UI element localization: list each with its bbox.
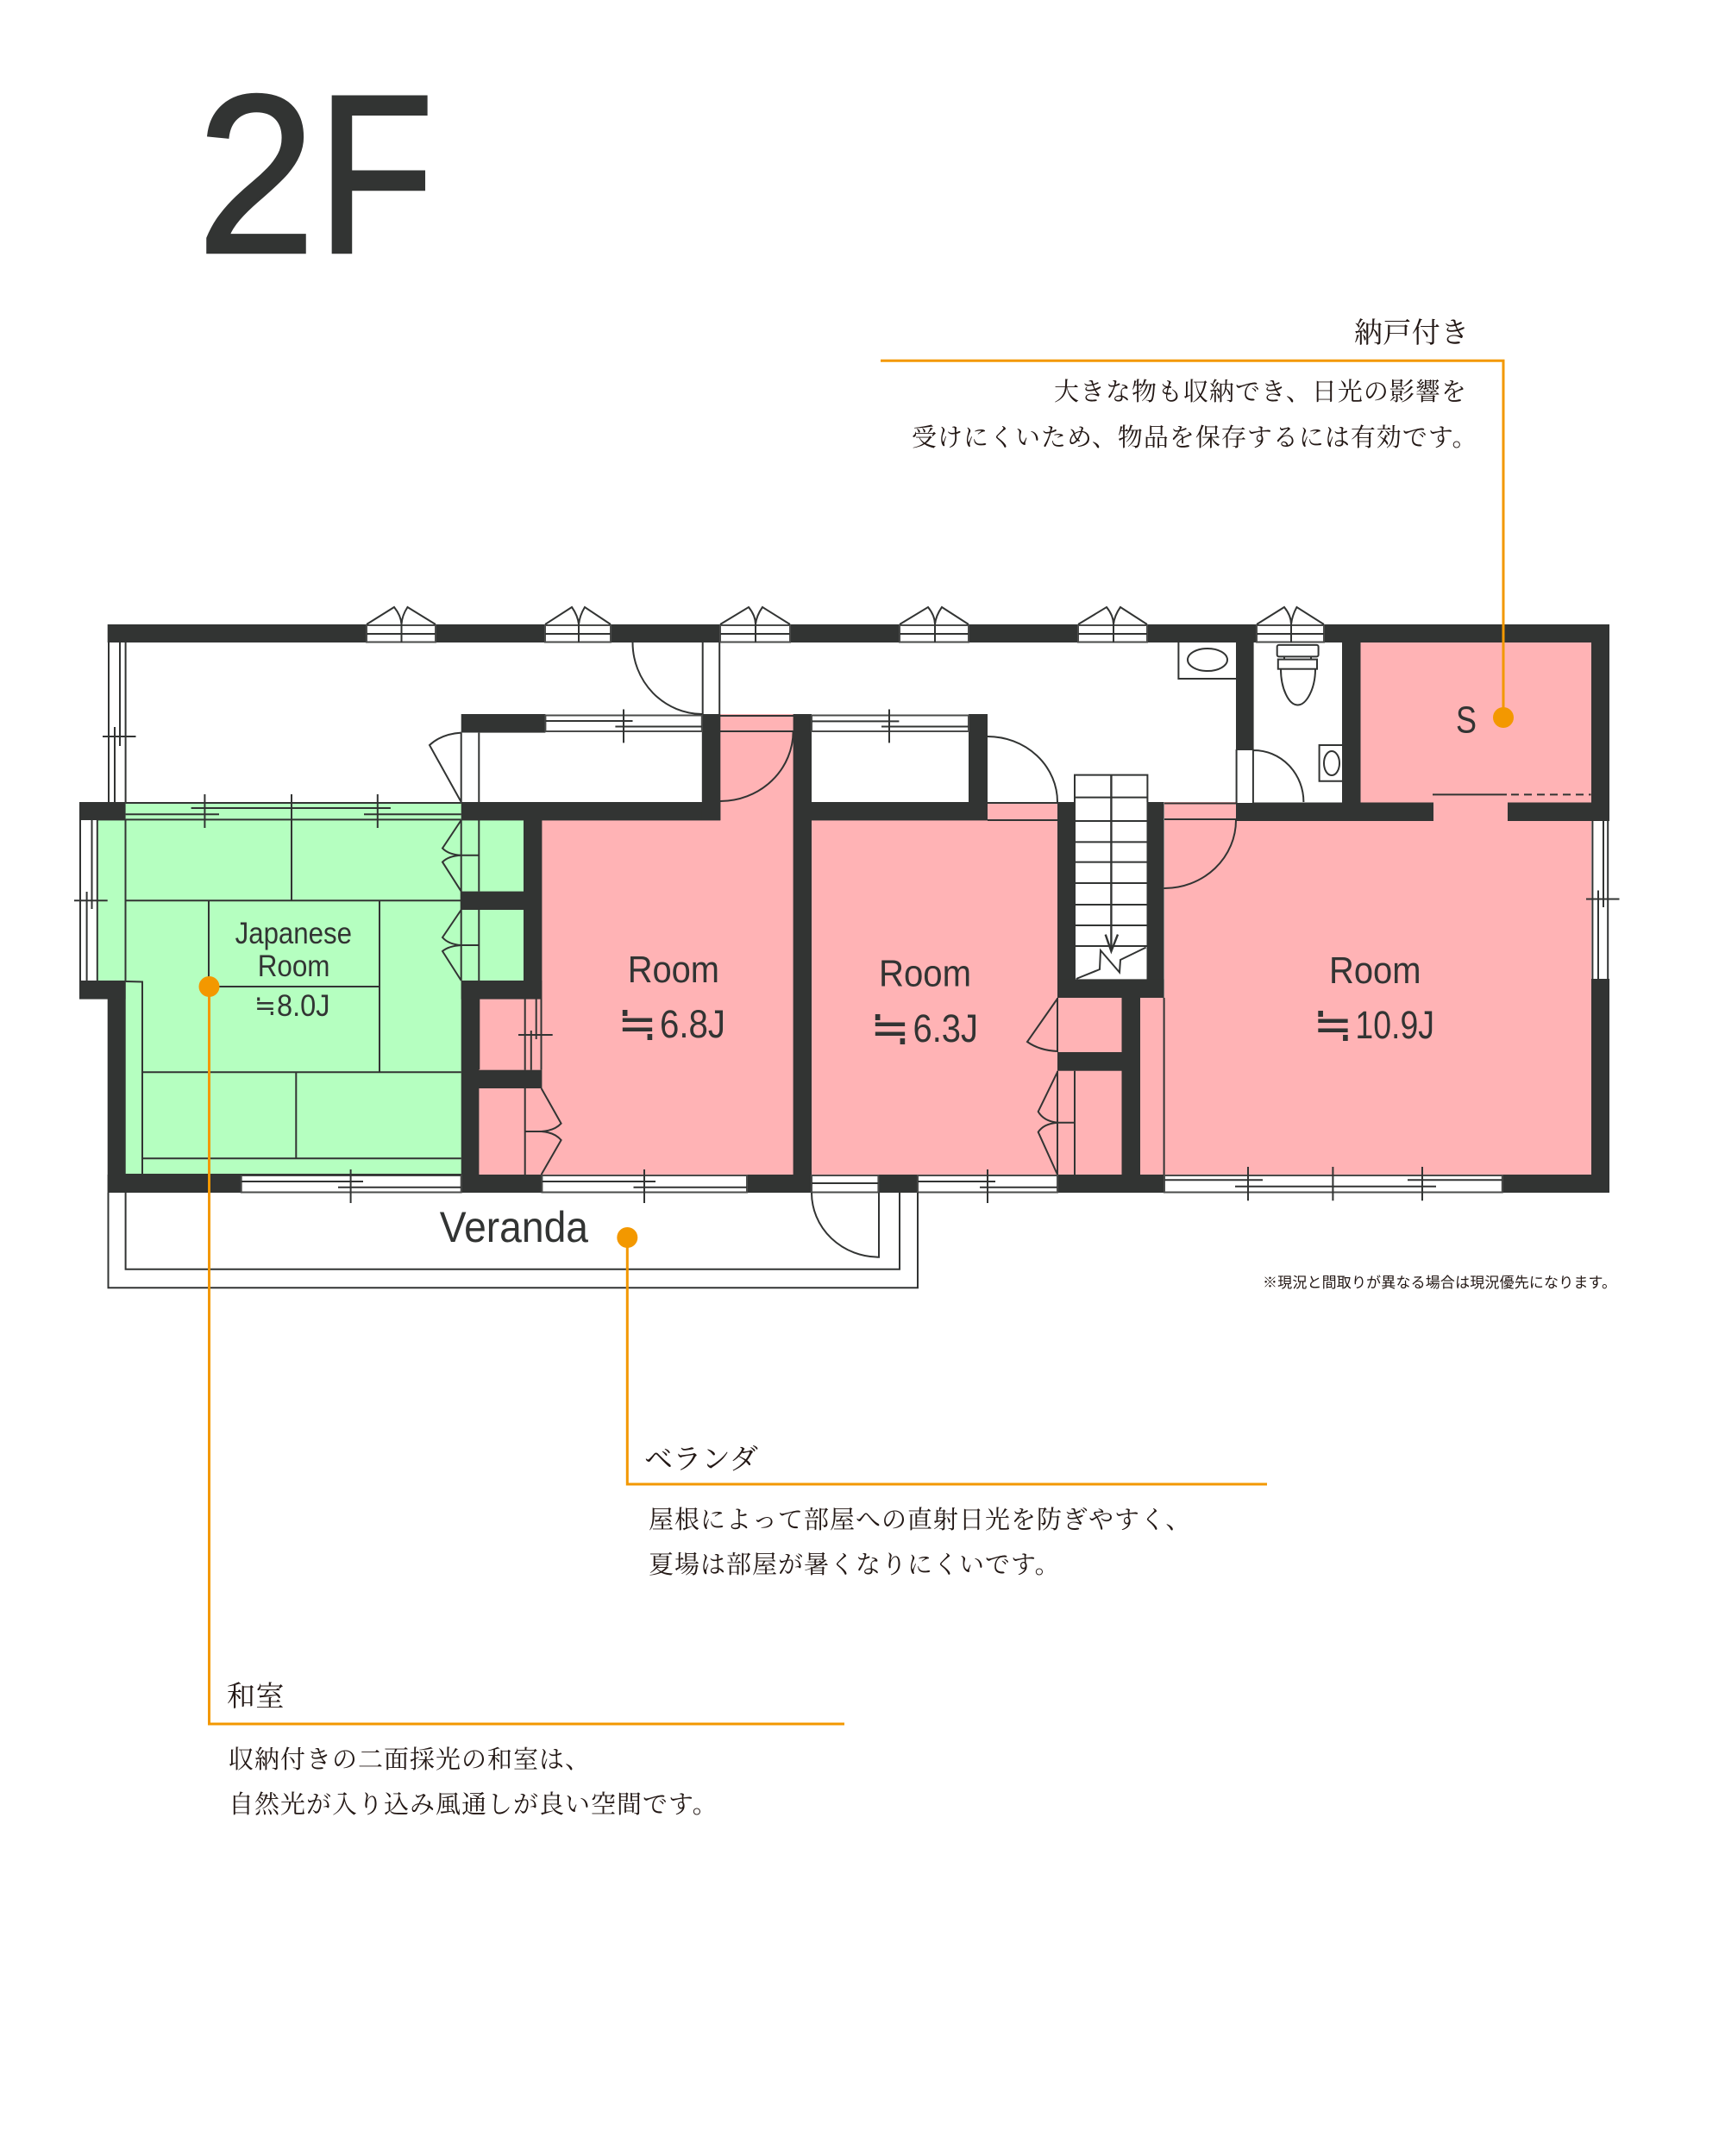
sink [1178,642,1236,679]
label: room 10.9J: ≒ [1313,986,1352,1056]
tatami lines [125,794,479,1175]
leader line: storage [881,360,1503,718]
marker: storage [1493,707,1514,728]
label: japanese room: Room [258,950,329,983]
label: room 6.3J: ≒ [870,989,910,1059]
note: ※現況と間取りが異なる場合は現況優先になります。 [1263,1270,1616,1292]
window: annex left [74,820,108,981]
heading: veranda: ベランダ [644,1437,758,1477]
window: upper inner left [545,709,702,743]
room fill: japanese room [97,802,524,1175]
title: 2F [197,48,434,300]
top shutter window 1 [367,607,436,642]
label: room 6.3J: 6.3J [913,1006,978,1050]
leader line: japanese room [209,987,844,1724]
label: room 6.8J: 6.8J [660,1002,725,1046]
door and closet lines: room 6.8J [479,716,794,1175]
body: japanese room: 収納付きの二面採光の和室は、 [229,1740,591,1776]
top shutter window 3 [720,607,790,642]
top shutter window 5 [1078,607,1147,642]
stairs [1075,775,1147,979]
callout: veranda [617,1227,1267,1581]
marker: japanese room [198,976,219,997]
door: room 10.9J [1164,804,1236,1175]
door: room 6.3J [988,736,1057,820]
body: veranda [649,1501,1191,1581]
closet doors: room 6.3J [1027,998,1075,1175]
room fill: room 6.8J [479,714,794,1175]
label: room 6.8J [618,949,725,1055]
label: storage S: S [1456,699,1477,742]
windows: bottom wall [242,1167,1502,1203]
label: japanese room: ≒ [254,982,276,1024]
room fill: room 10.9J and storage S [1164,642,1591,1175]
heading: storage: 納戸付き [1354,310,1470,351]
body: storage: 受けにくいため、物品を保存するには有効です。 [912,418,1478,454]
top shutter window 2 [545,607,611,642]
toilet door [1236,749,1303,803]
marker: veranda [617,1227,637,1248]
body: veranda: 夏場は部屋が暑くなりにくいです。 [649,1545,1061,1581]
title: 2F: F [317,48,434,300]
leader line: veranda [627,1238,1267,1484]
label: japanese room: Japanese [235,917,352,950]
window: left wall upper [103,642,136,802]
title: 2F: 2 [197,48,316,300]
label: room 10.9J: 10.9J [1355,1003,1434,1047]
heading: japanese room: 和室 [227,1674,285,1714]
body: storage: 大きな物も収納でき、日光の影響を [1054,373,1467,408]
door: hall upper [632,642,719,714]
body: storage [912,373,1478,454]
body: japanese room: 自然光が入り込み風通しが良い空間です。 [229,1785,718,1821]
veranda outline [109,1193,918,1288]
top shutter window 6 [1257,607,1324,642]
door: hall to japanese room side [430,733,479,802]
label: room 6.3J [870,953,978,1059]
body: japanese room [229,1740,718,1821]
callout: japanese room [198,976,844,1821]
toilet [1277,645,1319,705]
label: room 6.3J: Room [879,953,971,995]
label: room 10.9J [1313,950,1434,1056]
window: right wall [1586,820,1620,979]
room fill: room 6.3J [812,802,1164,1175]
label: japanese room: 8.0J [277,989,329,1023]
floor plan [74,607,1620,1288]
label: room 10.9J: Room [1329,950,1421,992]
body: veranda: 屋根によって部屋への直射日光を防ぎやすく、 [649,1501,1191,1536]
label: room 6.8J: ≒ [618,985,657,1055]
top shutter window 4 [900,607,969,642]
label: veranda: Veranda [440,1203,588,1251]
window: upper inner right [812,709,969,743]
stair floor [1076,775,1147,979]
label: room 6.8J: Room [628,949,719,991]
callout: storage [881,310,1514,728]
hand wash [1320,745,1342,781]
walls [79,624,1609,1193]
label: japanese room [235,917,352,1024]
storage sliding door [1433,793,1591,795]
